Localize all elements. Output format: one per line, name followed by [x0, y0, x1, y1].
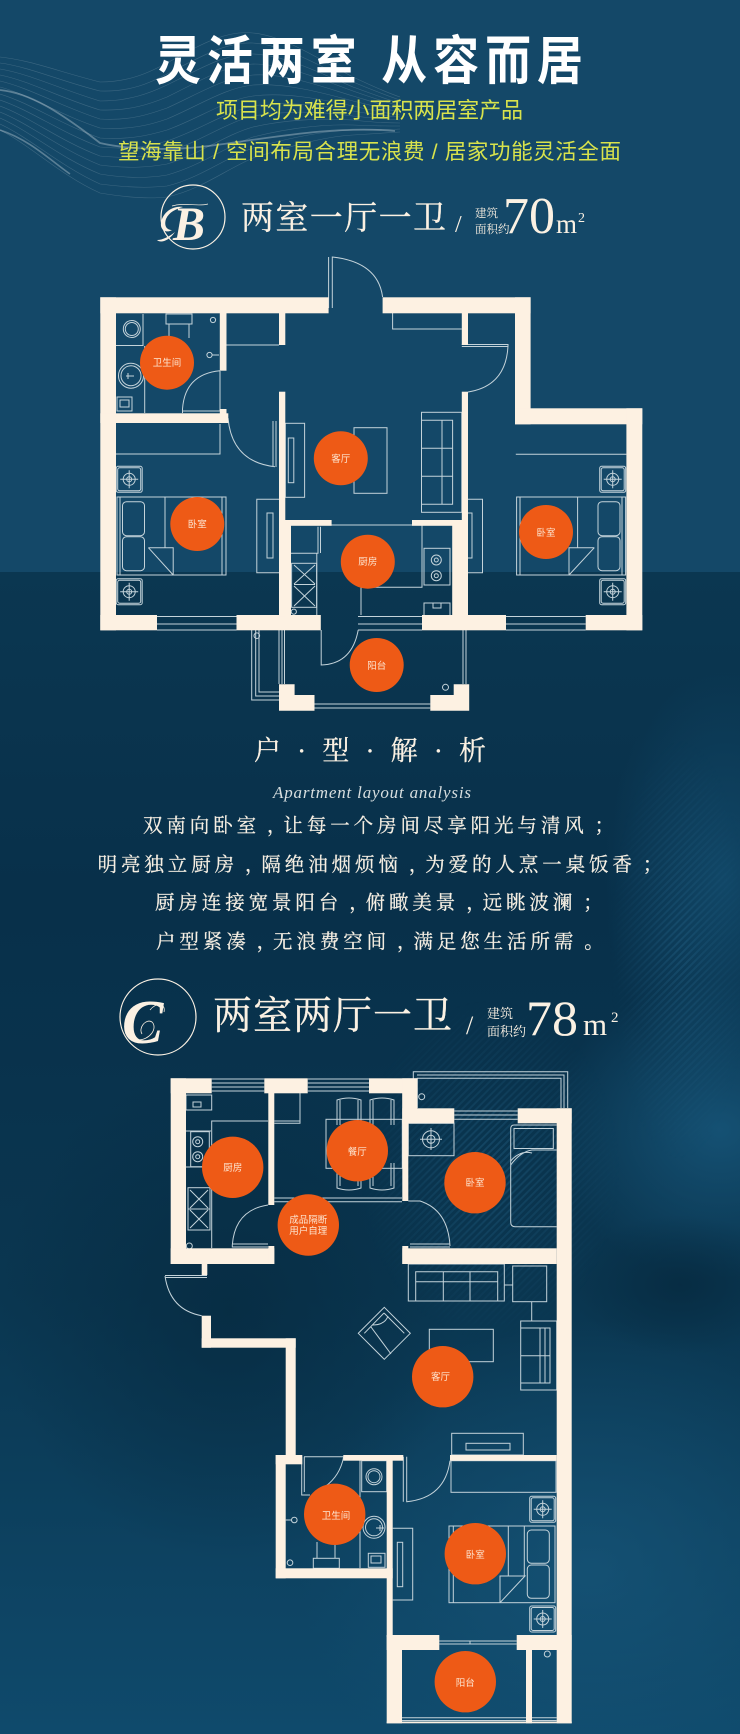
heading: plan C — [120, 979, 618, 1057]
room: 阳台: 阳台 — [367, 660, 386, 672]
badge: C: C — [122, 989, 164, 1057]
area label: 建筑 — [475, 206, 498, 220]
room: 厨房 — [202, 1137, 263, 1198]
room: 卧室 right: 卧室 — [536, 527, 556, 539]
room: 餐厅: 餐厅 — [348, 1146, 367, 1158]
heading: plan B — [157, 185, 585, 251]
wave lines — [0, 33, 400, 198]
analysis text: 明亮独立厨房 ，隔绝油烟烦恼 ，为爱的人烹一桌饭香 ； — [98, 854, 666, 876]
area label: 建筑 — [487, 1006, 513, 1021]
plan C furniture lines — [165, 1072, 568, 1720]
analysis heading: 户·型·解·析 — [254, 736, 486, 766]
analysis subheading: Apartment layout analysis — [272, 783, 471, 802]
room: 卧室 upper: 卧室 — [465, 1177, 485, 1189]
badge: C — [120, 979, 196, 1057]
room: 厨房: 厨房 — [223, 1162, 242, 1174]
room: 卫生间: 卫生间 — [322, 1510, 350, 1522]
plan B furniture lines — [116, 257, 626, 708]
area value 78: 78 — [526, 990, 578, 1046]
title: 灵活两室 从容而居 — [155, 32, 583, 91]
badge: B — [157, 185, 225, 251]
analysis text: 厨房连接宽景阳台 ，俯瞰美景 ，远眺波澜 ； — [155, 892, 607, 914]
analysis text — [98, 815, 666, 953]
room: 阳台 — [435, 1651, 496, 1712]
analysis text: 户型紧凑 ，无浪费空间 ，满足您生活所需 。 — [156, 931, 608, 953]
room: 卫生间: 卫生间 — [153, 357, 181, 369]
room: 卧室 lower: 卧室 — [466, 1549, 485, 1561]
room: 卫生间 — [304, 1484, 365, 1545]
room: 厨房 — [341, 535, 395, 589]
room: 卧室 right — [519, 505, 573, 559]
floor plan B — [100, 257, 642, 711]
area unit: 2 — [578, 211, 585, 226]
room: 成品隔断: 成品隔断 — [289, 1214, 328, 1226]
room: 客厅: 客厅 — [431, 1371, 450, 1383]
room: 卫生间 — [140, 336, 194, 390]
room: 成品隔断: 用户自理 — [289, 1225, 328, 1237]
room: 卧室 left: 卧室 — [188, 518, 207, 530]
plan B walls — [100, 297, 642, 711]
area value 70: 70 — [503, 188, 555, 245]
area label: 面积约 — [487, 1024, 526, 1039]
room: 客厅: 客厅 — [331, 453, 351, 465]
floor plan C — [165, 1072, 572, 1723]
plan B name: 两室一厅一卫 — [241, 200, 446, 237]
analysis text: 双南向卧室 ，让每一个房间尽享阳光与清风 ； — [143, 815, 618, 837]
room: 阳台: 阳台 — [456, 1677, 475, 1689]
subtitle line 1: 项目均为难得小面积两居室产品 — [216, 98, 523, 123]
subtitle line 2: 望海靠山 / 空间布局合理无浪费 / 居家功能灵活全面 — [118, 140, 621, 164]
area unit: m — [583, 1007, 607, 1042]
room: 卧室 lower — [445, 1523, 506, 1584]
room: 客厅 — [314, 431, 368, 485]
slash: / — [455, 212, 462, 238]
room: 厨房: 厨房 — [358, 556, 377, 568]
room: 卧室 upper — [444, 1152, 506, 1213]
plan C walls — [171, 1078, 572, 1723]
room: 客厅 — [412, 1346, 473, 1407]
room: 卧室 left — [170, 497, 224, 551]
area label: 面积约 — [475, 222, 510, 236]
area unit: 2 — [611, 1010, 618, 1026]
area unit: m — [556, 209, 577, 239]
room: 餐厅 — [327, 1120, 388, 1181]
plan B nightstands — [116, 466, 626, 605]
room: 阳台 — [350, 638, 404, 692]
plan C name: 两室两厅一卫 — [213, 995, 452, 1038]
slash: / — [466, 1011, 474, 1040]
room: 成品隔断 — [278, 1194, 339, 1256]
plan C nightstands — [530, 1496, 556, 1632]
badge: B: B — [172, 198, 205, 251]
